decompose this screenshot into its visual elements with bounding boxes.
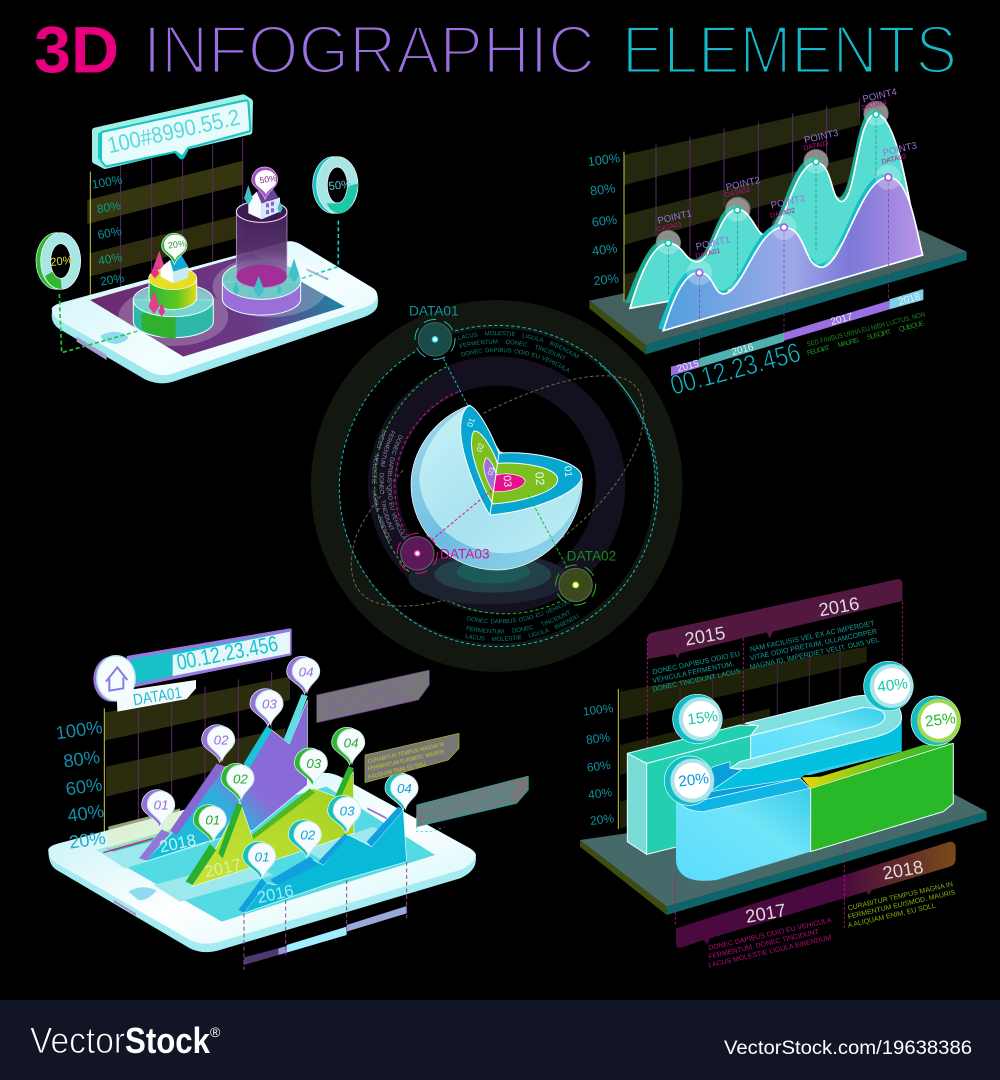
map pins: 01: [205, 813, 220, 828]
curved text left: [372, 430, 406, 541]
map pins: 01: [255, 849, 269, 864]
badge 20%: 20%: [677, 770, 710, 791]
node: DATA02: [556, 549, 616, 605]
point labels: DATA03: [881, 153, 907, 166]
title: 3D: [34, 12, 119, 86]
header: 2015 and 2016: [647, 579, 902, 659]
map pins: 03: [262, 697, 277, 712]
callout: code number: 100#8990.55.2: [105, 104, 242, 158]
y axis labels: 100%: [54, 716, 104, 743]
map pins: 02: [300, 828, 316, 843]
hemisphere: 01: [562, 466, 573, 478]
y axis labels: 80%: [589, 181, 616, 198]
timeline bars: 2016: [731, 342, 755, 358]
node: DATA01: DATA01: [409, 304, 459, 319]
y axis labels: [582, 701, 615, 828]
panel: 3D ribbon chart: [580, 579, 987, 970]
pin: 50%: [252, 167, 278, 199]
y axis labels: 40%: [66, 800, 105, 826]
hemisphere: [411, 405, 582, 570]
curved text top: DONEC DAPIBUS ODIO EU VEHICULA: [461, 348, 569, 373]
percent scale: 100%: [91, 172, 124, 192]
chart 2016: 2016: [255, 881, 295, 907]
y axis labels: 60%: [591, 213, 618, 230]
donut: 50%: [313, 157, 358, 213]
curved text left: DONEC DAPIBUS ODIO EU VEHICULA: [388, 434, 406, 540]
front mountain series: [658, 174, 923, 357]
slab: [589, 230, 967, 354]
point labels: POINT3: [803, 128, 840, 146]
hemisphere: 02: [532, 471, 547, 486]
map pins: 04: [397, 781, 412, 796]
curved text left: FERMENTUM DONEC TINCIDUNT: [380, 430, 396, 530]
y axis labels: 80%: [62, 746, 101, 772]
text 2017: [708, 917, 833, 970]
chart 2016: [238, 807, 407, 913]
curved text bottom: FERMENTUM DONEC TINCIDUNT BIBENDUM: [466, 610, 570, 634]
big number: 00.12.23.456: [667, 336, 804, 401]
shadow: [408, 552, 568, 604]
chart 2017: 2017: [203, 855, 243, 881]
dashed connectors: [59, 221, 338, 353]
note box purple: LACUS MOLESTIE LIGULA BIBENDUM: [322, 696, 415, 721]
footer bar: Vector: [30, 1020, 125, 1061]
note box yellow: FERMENTUM EUISMOD. MAURIS: [367, 749, 445, 773]
point labels: DATA04: [861, 99, 888, 112]
note box teal: [417, 776, 528, 832]
map pins: [142, 656, 418, 879]
footer bar: ®: [210, 1024, 221, 1040]
text 2015: DONEC TINCIDUNT LACUS: [652, 668, 742, 694]
base slab: [580, 788, 987, 915]
tablet body: [48, 773, 476, 952]
curved text bottom: LACUS MOLESTIE LIGULA BIBENDUM: [466, 614, 578, 641]
footer bar: Stock: [125, 1020, 211, 1061]
dashed orbits: [339, 325, 658, 647]
badge 25%: [911, 696, 961, 745]
right cylinder with tube: [222, 185, 301, 315]
text 2018: FERMENTUM EUISMOD. MAURIS: [847, 889, 956, 921]
year labels 2017 2018: 2018: [881, 856, 925, 884]
text 2015: DONEC DAPIBUS ODIO EU: [652, 651, 741, 676]
year labels 2017 2018: 2017: [744, 899, 788, 927]
map pins: 02: [214, 733, 229, 748]
node: DATA03: DATA03: [440, 546, 490, 561]
panel: smartphone with cylinders: [36, 97, 378, 383]
node: DATA03: [397, 533, 490, 573]
percent scale: 40%: [97, 250, 123, 268]
node: DATA01: [409, 304, 459, 359]
map pins: 04: [299, 664, 313, 679]
point labels: POINT2: [725, 175, 761, 194]
title: INFOGRAPHIC: [143, 12, 595, 88]
map pins: 01: [154, 798, 168, 813]
grey marker halos: [656, 101, 901, 255]
curved text bottom: [466, 598, 578, 641]
node: DATA02: DATA02: [567, 549, 616, 564]
percent scale: 20%: [99, 271, 125, 289]
panel: tablet with line charts: [48, 630, 528, 970]
header: 2015 and 2016: 2016: [817, 593, 861, 620]
footer bar: VectorStock.com/19638386: [724, 1038, 972, 1059]
badge 20%: [664, 756, 714, 805]
y axis labels: 40%: [591, 241, 618, 258]
note box purple: DONEC DAPIBUS ODIO EU VEHICULA: [322, 681, 413, 705]
map pins: 03: [306, 756, 322, 771]
point labels: DATA02: [725, 187, 751, 199]
curved text top: LACUS MOLESTIE LIGULA BIBENDUM: [458, 331, 579, 358]
ribbon front section: [676, 762, 811, 881]
header: 2015 and 2016: 2015: [683, 622, 727, 650]
point labels: [657, 87, 918, 260]
text 2016: MAGNA ID, IMPERDIET VELIT. DUIS VEL: [749, 637, 880, 671]
text 2017: FERMENTUM. DONEC TINCIDUNT: [708, 929, 820, 961]
title: [34, 12, 957, 88]
percent scale: [91, 172, 125, 289]
text 2017: DONEC DAPIBUS ODIO EU VEHICULA: [708, 917, 833, 952]
year labels 2017 2018: [744, 856, 925, 927]
header badge: 00.12.23.456: [175, 631, 280, 675]
point labels: POINT1: [695, 234, 731, 253]
panel: central hemisphere diagram: [311, 300, 682, 672]
point labels: DATA01: [695, 248, 721, 260]
ribbon back section: [693, 695, 902, 808]
y axis labels: [54, 716, 107, 853]
text 2017: LACUS MOLESTIE LIGULA BIBENDUM: [708, 934, 832, 970]
data point markers: [656, 102, 901, 285]
y axis labels: 20%: [68, 827, 107, 853]
note box purple: FERMENTUM. DONEC TINCIDUNT: [322, 690, 406, 713]
text 2018: [847, 881, 956, 930]
text 2015: [652, 651, 742, 694]
phone body: [52, 241, 378, 383]
note box teal: NAM FACILISIS VEL EX AC IMPERDIET: [422, 785, 516, 812]
curved text top: FERMENTUM DONEC TINCIDUNT: [460, 339, 566, 360]
donut: 50%: 50%: [328, 179, 352, 193]
y axis labels: 100%: [587, 151, 621, 169]
text 2018: A ALIQUAM ENIM, EU SOLL: [847, 903, 937, 930]
hemisphere: 03: [501, 475, 514, 488]
note box yellow: A ALIQUAM ENIM, EU SOLL: [367, 761, 427, 781]
badge 40%: [864, 661, 914, 711]
glow discs: [118, 256, 327, 346]
y axis labels: [587, 151, 621, 288]
footer bar: [0, 1000, 1000, 1080]
badge 40%: 40%: [876, 675, 909, 696]
point labels: POINT3: [882, 140, 918, 159]
y axis labels: 20%: [593, 271, 620, 288]
timeline bars: [671, 289, 923, 376]
panel: area chart on slab: [587, 87, 967, 401]
header badge: [93, 630, 290, 712]
timeline bars: 2018: [897, 291, 922, 308]
timeline bars: 2017: [830, 311, 854, 328]
y axis labels: 20%: [589, 811, 615, 828]
green caption: FEUGIAT MAURIS SUSCIPIT QUISQUE: [806, 320, 925, 357]
point labels: DATA03: [803, 140, 829, 153]
rings: [325, 314, 668, 658]
percent scale: 60%: [96, 224, 123, 242]
teal box segment: [627, 725, 758, 854]
chart 2017: [186, 766, 354, 887]
badge 15%: 15%: [686, 708, 719, 729]
note box teal: MAGNA ID, IMPERDIET VELIT. DUIS VEL: [422, 799, 516, 826]
point labels: POINT2: [770, 193, 806, 212]
magenta guide lines: [647, 602, 902, 928]
text 2016: [749, 620, 880, 671]
chart 2018: [139, 694, 308, 862]
y axis labels: 80%: [585, 730, 611, 747]
point labels: POINT4: [862, 87, 899, 105]
text 2015: VEHICULA FERMENTUM.: [652, 661, 735, 685]
leader lines: [432, 358, 567, 567]
back mountain series: [625, 109, 920, 308]
note box yellow: [365, 733, 459, 783]
hemisphere: 03: [485, 466, 497, 477]
donut: 20%: 20%: [50, 255, 74, 269]
y axis labels: 40%: [587, 785, 613, 802]
hemisphere: 02: [475, 441, 486, 453]
percent scale: 80%: [96, 198, 122, 216]
text 2016: NAM FACILISIS VEL EX AC IMPERDIET: [749, 620, 876, 654]
timeline bars: 2015: [676, 358, 701, 375]
point labels: POINT1: [657, 208, 693, 227]
chart 2018: 2018: [158, 830, 198, 857]
text 2018: CURABITUR TEMPUS MAGNA IN: [847, 881, 954, 912]
donut: 20%: [36, 233, 81, 289]
map pins: 02: [233, 771, 248, 786]
pin: 20%: [162, 233, 187, 264]
title: ELEMENTS: [622, 12, 957, 88]
timeline under tablet: [244, 862, 407, 970]
note box teal: VITAE ODIO PRETIUM, ULLAMCORPER: [422, 792, 514, 819]
curved text left: LACUS MOLESTIE LIGULA BIBENDUM: [372, 430, 392, 541]
y axis labels: 100%: [582, 701, 614, 719]
pin: 20%: 20%: [167, 238, 186, 251]
hemisphere: 01: [465, 416, 477, 428]
point labels: DATA01: [657, 221, 683, 234]
text 2016: VITAE ODIO PRETIUM, ULLAMCORPER: [749, 628, 878, 662]
header: 2017 and 2018: [676, 842, 956, 948]
green box segment: [802, 743, 953, 852]
curved text top: [458, 331, 579, 373]
note box purple: [317, 670, 429, 723]
point labels: DATA02: [770, 207, 796, 220]
green caption: SED FINIBUS URNA EU NIBH LUCTUS, NON: [806, 311, 926, 349]
map pins: 03: [340, 803, 355, 818]
curved text bottom: DONEC DAPIBUS ODIO EU VEHICULA: [467, 598, 573, 624]
badge 15%: [673, 694, 723, 744]
pin: 50%: 50%: [259, 173, 278, 185]
header badge: DATA01: [132, 685, 183, 709]
left cylinder stack: [133, 251, 213, 338]
y axis labels: 60%: [586, 758, 612, 775]
badge 25%: 25%: [924, 710, 957, 731]
note box yellow: CURABITUR TEMPUS MAGNA IN: [367, 742, 445, 765]
y axis labels: 60%: [64, 773, 104, 799]
map pins: 04: [344, 735, 358, 750]
